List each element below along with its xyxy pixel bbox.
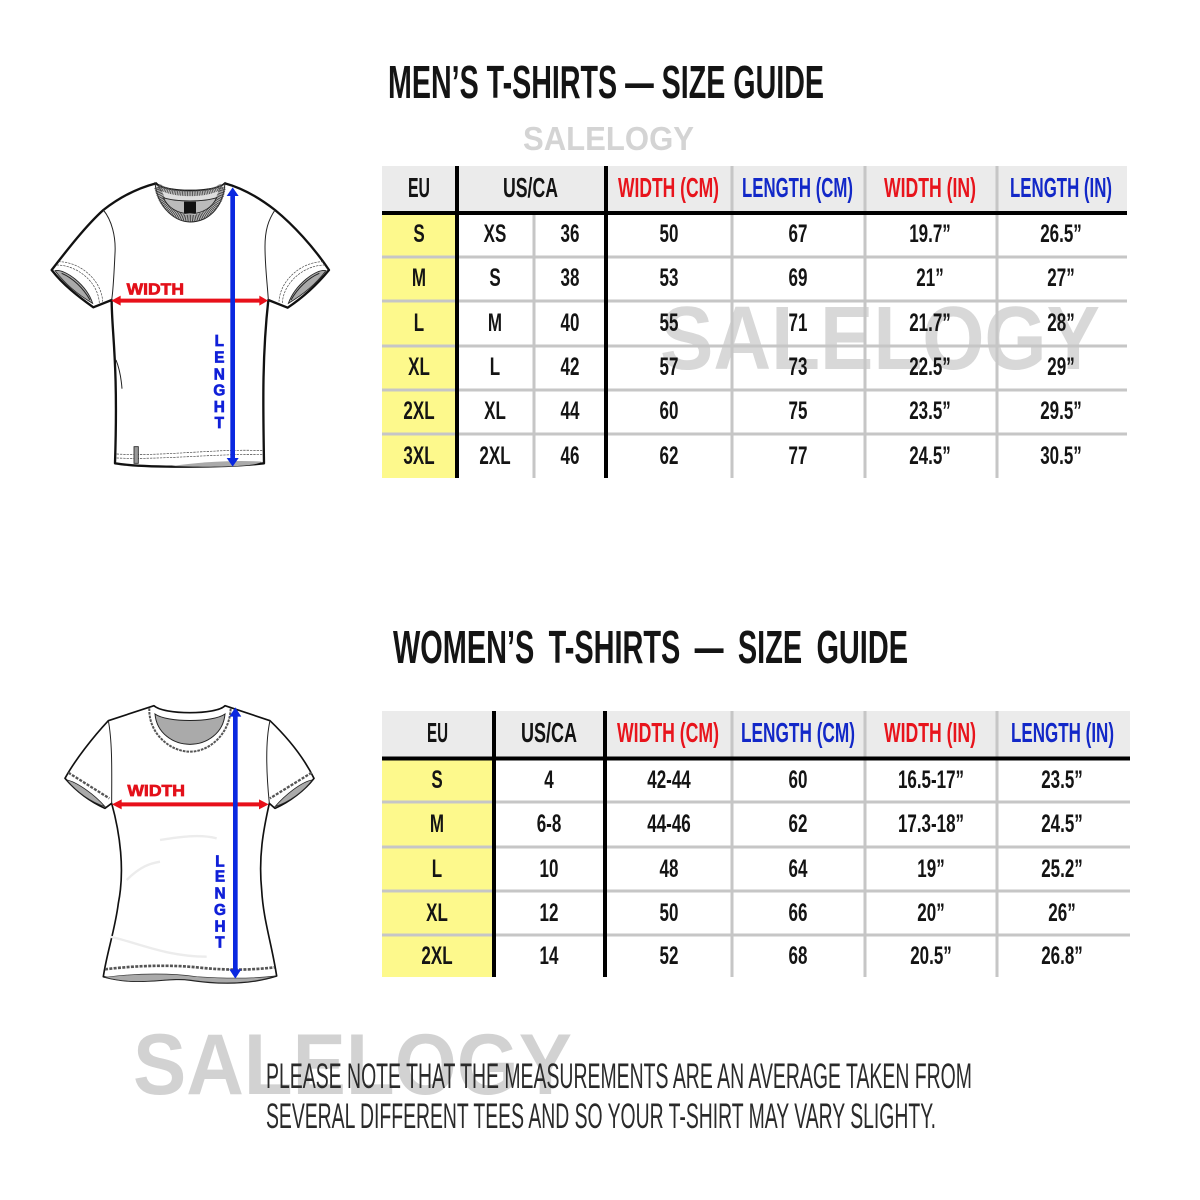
row L: 64: [789, 855, 808, 883]
header row: EU: [427, 717, 448, 748]
right cuff stitching: [279, 262, 325, 303]
row 2XL: [403, 397, 1082, 425]
row S: 4: [544, 766, 554, 794]
row 3XL: 2XL: [479, 442, 511, 470]
row XL: 57: [660, 353, 678, 381]
right armhole seam: [267, 721, 270, 803]
shirt outline: [52, 183, 329, 467]
side seam: [116, 360, 122, 389]
row M: S: [489, 264, 501, 292]
row 3XL: 3XL: [403, 442, 435, 470]
row S: S: [413, 220, 425, 248]
header row: US/CA: [521, 717, 577, 748]
row M: M: [430, 810, 444, 838]
row S: 42-44: [647, 766, 691, 794]
row 2XL: 60: [660, 397, 678, 425]
row S: 26.5”: [1040, 220, 1082, 248]
row M: 24.5”: [1041, 810, 1083, 838]
row M: 6-8: [537, 810, 561, 838]
row M: 44-46: [647, 810, 691, 838]
collar front rib: [158, 187, 222, 218]
label: lenght: E: [215, 869, 225, 886]
label: lenght: L: [215, 333, 224, 350]
collar back rib: [158, 186, 222, 193]
row XL: 29”: [1047, 353, 1075, 381]
header row: LENGTH (IN): [1011, 717, 1114, 748]
row XL: XL: [426, 899, 448, 927]
row L: L: [414, 309, 424, 337]
row S: 36: [561, 220, 580, 248]
row XL: [426, 899, 1076, 927]
table: men's sizes: [382, 166, 1127, 478]
row XL: 22.5”: [909, 353, 951, 381]
row M: 27”: [1047, 264, 1075, 292]
row L: 21.7”: [909, 309, 951, 337]
left sleeve cuff: [55, 270, 93, 303]
header background: [382, 711, 1130, 757]
row M: [412, 264, 1075, 292]
row S: XS: [484, 220, 506, 248]
row XL: L: [490, 353, 500, 381]
row 2XL: [421, 942, 1083, 970]
row 2XL: 20.5”: [910, 942, 952, 970]
row 3XL: 30.5”: [1040, 442, 1082, 470]
fabric folds: [110, 836, 217, 957]
arrow: width: [111, 296, 268, 306]
collar fill: [155, 183, 225, 222]
illustration: men's t-shirt with measurement arrows: [52, 183, 329, 467]
left cuff stitching: [57, 262, 103, 303]
header row: LENGTH (CM): [741, 717, 855, 748]
row 2XL: 75: [789, 397, 808, 425]
row 2XL: 26.8”: [1041, 942, 1083, 970]
row L: 71: [789, 309, 808, 337]
label: lenght: H: [214, 918, 226, 935]
left armhole seam: [108, 721, 112, 803]
left cuff inner line: [62, 273, 90, 300]
title: men's size guide: MEN’S T-SHIRTS — SIZE GUIDE: [388, 56, 824, 108]
row XL: [408, 353, 1075, 381]
label: width: WIDTH: [127, 783, 185, 800]
row 2XL: 52: [660, 942, 679, 970]
row M: M: [412, 264, 426, 292]
watermark: behind men's table: SALELOGY: [660, 289, 1100, 389]
row XL: 26”: [1048, 899, 1076, 927]
row M: 62: [789, 810, 808, 838]
header row: LENGTH (CM): [742, 172, 853, 203]
right sleeve cuff: [275, 780, 312, 807]
header row: [408, 172, 1112, 203]
label: lenght: N: [214, 885, 226, 902]
row 2XL: 14: [540, 942, 559, 970]
header row: EU: [408, 172, 430, 203]
illustration: women's t-shirt with measurement arrows: [65, 706, 314, 983]
left armhole seam: [103, 210, 115, 300]
watermark: bottom: SALELOGY: [133, 1017, 572, 1113]
header row: US/CA: [503, 172, 558, 203]
grid lines: [382, 166, 1127, 478]
row XL: XL: [408, 353, 430, 381]
row L: L: [432, 855, 442, 883]
row 3XL: 24.5”: [909, 442, 951, 470]
label: lenght: N: [214, 366, 225, 383]
row L: 10: [540, 855, 558, 883]
label: lenght: E: [214, 350, 224, 367]
header row: [427, 717, 1114, 748]
row 2XL: 23.5”: [909, 397, 951, 425]
row M: 53: [660, 264, 679, 292]
row L: [414, 309, 1075, 337]
neck trim: [149, 708, 231, 752]
row 2XL: 2XL: [421, 942, 453, 970]
row XL: 66: [789, 899, 808, 927]
hem inner band: [105, 974, 275, 983]
label: width: WIDTH: [127, 281, 184, 298]
hem inner sliver: [172, 461, 262, 467]
thick rules: [382, 711, 1130, 977]
header row: WIDTH (IN): [884, 717, 976, 748]
row XL: 42: [561, 353, 580, 381]
shirt outline: [65, 706, 314, 983]
hem stitching: [105, 966, 274, 970]
row S: 67: [789, 220, 807, 248]
inner neck: [155, 714, 225, 744]
label: lenght: G: [214, 902, 226, 919]
header row: WIDTH (CM): [618, 172, 719, 203]
footer note: [266, 1057, 972, 1136]
row 3XL: [403, 442, 1082, 470]
thick rules: [382, 166, 1127, 478]
header row: WIDTH (IN): [884, 172, 976, 203]
table: women's sizes: [382, 711, 1130, 977]
row XL: 73: [789, 353, 808, 381]
arrow: width: [112, 799, 269, 809]
row L: 19”: [917, 855, 945, 883]
EU column highlight: [382, 214, 456, 478]
left sleeve cuff: [67, 780, 105, 807]
label: lenght: G: [213, 382, 225, 399]
row S: 23.5”: [1041, 766, 1083, 794]
hem tag: [134, 447, 138, 463]
row S: 16.5-17”: [898, 766, 964, 794]
label: lenght: [213, 333, 225, 432]
row L: 48: [660, 855, 679, 883]
right sleeve cuff: [288, 270, 326, 303]
hem stitching: [117, 450, 263, 458]
row S: [431, 766, 1083, 794]
row 2XL: 29.5”: [1040, 397, 1082, 425]
row S: S: [431, 766, 443, 794]
label: lenght: H: [214, 399, 225, 416]
right cuff inner line: [291, 273, 319, 300]
row XL: 20”: [917, 899, 945, 927]
watermark: small top: SALELOGY: [523, 120, 694, 157]
arrow: length: [229, 707, 241, 979]
row 2XL: 44: [561, 397, 580, 425]
row S: 50: [660, 220, 678, 248]
row XL: 50: [660, 899, 678, 927]
EU column highlight: [382, 760, 492, 977]
row L: M: [488, 309, 502, 337]
label: lenght: L: [215, 853, 225, 870]
label: lenght: T: [215, 415, 225, 432]
label: lenght: T: [215, 934, 225, 951]
row 3XL: 46: [561, 442, 580, 470]
header row: LENGTH (IN): [1010, 172, 1112, 203]
row M: 17.3-18”: [898, 810, 964, 838]
row L: [432, 855, 1083, 883]
row M: 38: [561, 264, 580, 292]
row M: 21”: [916, 264, 944, 292]
row M: [430, 810, 1083, 838]
row 3XL: 62: [660, 442, 679, 470]
row 2XL: XL: [484, 397, 506, 425]
row S: [413, 220, 1082, 248]
row XL: 12: [540, 899, 559, 927]
row L: 40: [561, 309, 579, 337]
grid lines: [382, 711, 1130, 977]
row L: 25.2”: [1041, 855, 1083, 883]
header background: [382, 166, 1127, 212]
row S: 19.7”: [909, 220, 951, 248]
header row: WIDTH (CM): [617, 717, 719, 748]
row M: 69: [789, 264, 808, 292]
inner neck: [163, 198, 217, 214]
right armhole seam: [265, 210, 275, 300]
row S: 60: [789, 766, 807, 794]
title: women's size guide: WOMEN’S T-SHIRTS — SIZE GUIDE: [393, 621, 908, 673]
row L: 55: [660, 309, 679, 337]
row 2XL: 2XL: [403, 397, 435, 425]
neck label: [184, 202, 196, 213]
row L: 28”: [1047, 309, 1075, 337]
row 2XL: 68: [789, 942, 808, 970]
arrow: length: [227, 187, 239, 467]
cuff stitching: [68, 773, 312, 798]
label: lenght: [214, 853, 226, 951]
row 3XL: 77: [789, 442, 807, 470]
